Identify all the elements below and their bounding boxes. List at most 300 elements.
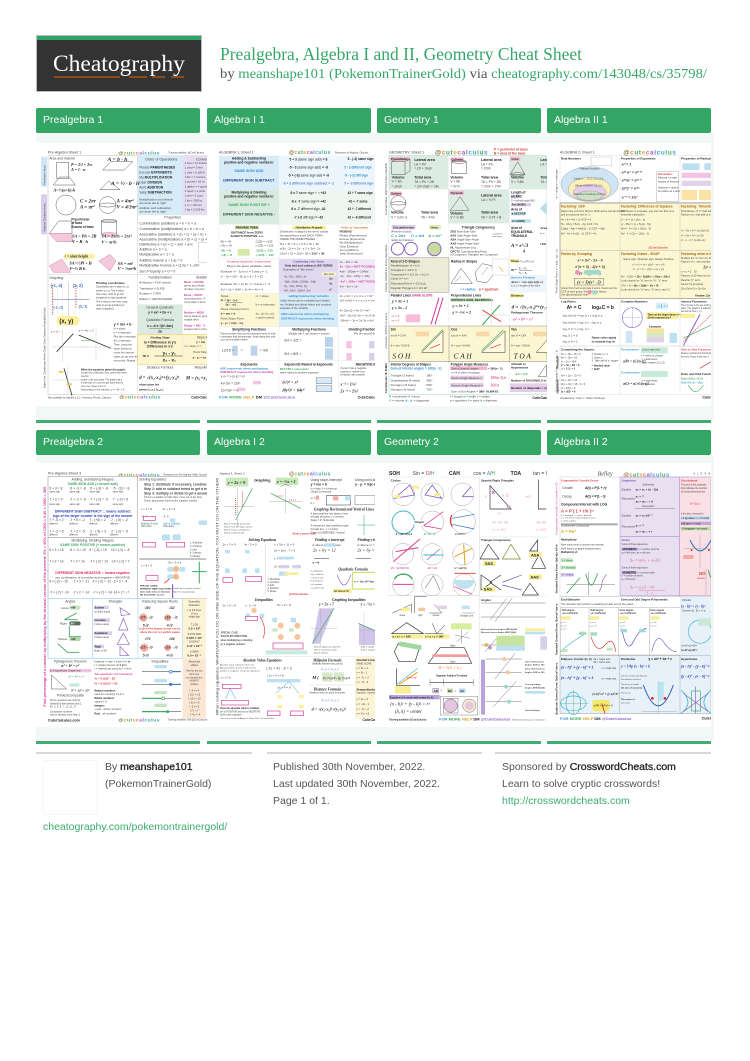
panel: solving equations: x + 4x = 12 — [274, 556, 289, 560]
panel: properties: Zero Property a × 0 = 0 — [139, 269, 175, 273]
panel: log rules: Log Rules: — [561, 300, 577, 304]
panel: inequalities: -5x + 3 > 8 — [277, 603, 291, 607]
panel: area of 2-D shapes: Triangle A = 1/2 b·h — [391, 268, 417, 272]
panel: area and volume: P = 2·l + 2w — [71, 162, 92, 167]
panel: angles: Corresponding — [525, 684, 541, 686]
panel: intercepts — [313, 538, 388, 564]
side tabs: Perimeter Area — [42, 165, 46, 185]
panel: line and polygon angles: a + a + c = 180° — [392, 635, 411, 639]
panel: order of operations: My MULTIPLICATION — [139, 175, 173, 179]
panel: reducing square roots: Look for the largest root we can do, — [139, 628, 181, 631]
panel: order of operations: Order of Operations — [145, 157, 177, 161]
panel: completing the square: (x + 3/2)² = 6 — [561, 390, 576, 394]
panel: pythagorean theorem and area composite: Ex: 2, 3, 5, 7, 11, 13, 17 — [50, 706, 77, 709]
heading: Geometry 1 — [377, 108, 541, 133]
panel: inequalities — [221, 598, 308, 654]
panel: solving equations: 5. Multiply — [190, 555, 201, 558]
panel: distributive property — [279, 224, 339, 259]
panel: multiplying and dividing integers: -7 × 2 = -14 — [73, 591, 89, 595]
panel: absolute value: positive — [190, 683, 199, 686]
panel: ellipses, parabola, hyperbola: (y - k)² - (x - h)² = — [681, 674, 710, 678]
panel: factoring: 5x - 10xy = 5x(1 - 2y) GCF = 5x — [561, 222, 599, 226]
panel: graphing: y-intercept of 3, and we get down and up — [81, 382, 124, 385]
heading: Prealgebra 1: Prealgebra 1 — [43, 114, 103, 126]
panel: parallel and perpendicular: y = -⅓x - 1 — [357, 702, 370, 706]
panel: altitude and diagonals: Hypotenuse — [511, 366, 529, 370]
panel: combining like terms: ab — [329, 277, 333, 281]
panel: factoring — [560, 203, 718, 298]
panel: pythagorean theorem and area composite: Prime numbers can only be — [50, 699, 81, 702]
panel: pyramid: TA = ½ Pl + B — [481, 215, 502, 219]
heading: Algebra I 1 — [207, 108, 371, 133]
panel: transformations: Translation = SLIDE — [139, 286, 165, 290]
panel: complex numbers: Take out the largest factor of i — [648, 313, 681, 316]
panel: circles: Circles — [391, 478, 401, 482]
panel: slope-intercept: (Slope) (y-intercept) — [311, 491, 332, 494]
panel: area and volume: SA = 2πrh + 2πr² — [101, 234, 132, 239]
panel: pythagorean theorem and area composite: a² is hypotenuse, longest side — [50, 670, 82, 673]
panel: cone: V = ⅓Bh — [511, 180, 524, 184]
panel: properties: Commutative (addition) a + b = b + a — [139, 222, 196, 226]
panel: special right triangles: Special Right Triangles — [481, 478, 514, 482]
panel: factoring: Factor by Grouping — [561, 252, 592, 256]
panel: adding and subtracting integers: -5 + -3 = -8 — [69, 486, 86, 490]
panel: series: ARITHMETIC — [622, 548, 637, 551]
panel: SOH CAH TOA: θ = sin⁻¹(O/H) — [391, 343, 410, 347]
panel: adding and subtracting integers: different — [110, 522, 119, 525]
panel: sequences: Explicit — [622, 488, 631, 492]
panel: pyramid: Volume — [450, 211, 463, 215]
panel: pythagorean theorem and area composite: Pythagorean Theorem — [54, 659, 87, 663]
panel: cylinder: = πr²h — [450, 184, 460, 188]
panel: quadratic formula: x, y form and — [311, 576, 324, 579]
panel: exponents: 2x⁻³ = 2/x³ — [340, 388, 359, 393]
panel: graphing: y = -⅓x + 3 — [79, 329, 94, 333]
panel: graphing: Step 1: Find the y-intercept — [224, 522, 251, 525]
panel: graphing horizontal and vertical — [311, 507, 376, 535]
panel: graphing: (3,-1) — [79, 305, 88, 309]
panel: multiplying and dividing: DIFFERENT SIGN NEGATIVE - — [223, 212, 276, 216]
panel: ellipses, parabola, hyperbola: Ellipses: Center (h, k) — [561, 657, 592, 661]
panel: prism/cube: Prism/Cube — [391, 157, 408, 161]
panel: cylinder: Volume — [450, 175, 463, 179]
panel: absolute value: ALWAYS POSITIVE +++ — [231, 234, 264, 238]
panel: interior angles: Quadrilateral (4 sides) — [391, 378, 420, 382]
panel: log rules: Same rules apply — [592, 335, 617, 339]
panel: real numbers: Real Numbers — [561, 157, 582, 161]
panel: equilateral triangle: Area — [540, 226, 547, 230]
panel: SOH CAH TOA: θ = cos⁻¹(A/H) — [451, 343, 470, 347]
panel: properties: Addition a + 0 = a — [139, 248, 167, 252]
panel: parallel and perpendicular — [355, 657, 378, 718]
panel: completing the square: = (b/2)² — [592, 367, 600, 371]
panel: absolute value: |-8| = +8 — [221, 244, 232, 248]
panel: adding and subtracting integers: different — [89, 534, 98, 537]
panel: slope block: y - y₁ = m(x - x₁) — [221, 321, 244, 325]
panel: factoring: (x + 3)(x² - 2) — [579, 271, 602, 275]
panel: graphing: y = 2x - 1 — [51, 329, 63, 333]
panel: solving equations: Solving Equations: — [139, 477, 167, 481]
panel: scientific notation: 1 to 9.9 times — [187, 609, 202, 612]
panel: graphing inequalities — [311, 598, 378, 655]
panel: angles: Angles ARE EQUAL — [525, 686, 546, 689]
panel: triangles: Right — [95, 645, 101, 648]
panel: absolute value: | 7 | = 7 — [190, 709, 199, 713]
heading: SOH CAH TOA strip: TOA — [511, 471, 522, 477]
panel: transformations: Reflection = FLIP (mirror) — [139, 281, 171, 285]
panel: multiplying and dividing: 6 x -7 different sign -42 — [292, 207, 326, 211]
panel: conversions: 1 foot = 12 inches — [185, 161, 207, 165]
panel: adding and subtracting: -5 - (-3) diff sign — [345, 173, 368, 177]
footer: author — [105, 761, 211, 790]
panel: exponential growth and decay: t = time in years — [561, 519, 576, 522]
panel: circles: (x-h)²+(y-k)²= — [681, 644, 697, 648]
panel: solving equations: 2x + 3 = 9 — [223, 542, 236, 546]
panel: midpoint and distance formula: d = √(x₂-x₁)²+(y₂-y₁)² — [312, 706, 347, 711]
panel: permutation and combination: n = total items — [642, 358, 658, 361]
panel: permutation and combination: Permutation: — [621, 348, 640, 352]
panel: slope block: y = mx + b — [221, 311, 236, 315]
panel: ellipses, parabola, hyperbola: 2a = major axis — [593, 658, 611, 661]
panel: absolute value: -|-125| = -125 — [256, 253, 274, 257]
side rotated pink text: Find percentage of a number by multiplying by the decimal version of the percent: 5% = 60% of 1500 = 0.40 × 1500 = 360 — [43, 487, 47, 707]
panel: cylinder: = 2πrh + 2πr² — [481, 184, 502, 188]
panel: scientific notation: 5,670,000 — [188, 632, 201, 636]
side rotated text: When solving equations, WHATEVER YOU DO ON ONE SIDE OF THE EQUATION, YOU MUST DO ON THE OTHER! — [216, 478, 220, 715]
panel: properties — [138, 215, 217, 274]
panel: adding and subtracting — [219, 156, 376, 190]
panel: prism/cube: LA = Ph — [414, 163, 426, 167]
panel: order of operations cell: Sally (Subtraction) — [340, 252, 363, 256]
panel: circumference and area: A = πr² — [428, 233, 442, 238]
panel: distance and pythagorean: a² + b² = c² — [513, 316, 533, 321]
panel: factoring: (x + 3)(x² - 2) — [577, 279, 602, 284]
sheet: Pre-Algebra Sheet 1: Also available for Algebra 1 & 2, Geometry, Precalc, Calculus — [48, 396, 112, 399]
panel: distance and midpoint: points (x₁,y₁) (x₂,y₂) — [138, 387, 164, 391]
panel: adding and subtracting integers: different — [49, 534, 58, 537]
panel: arc and sector: Area of — [511, 207, 523, 211]
side rotated text — [554, 169, 558, 392]
panel: graphing: Write the equation given the graph: — [81, 367, 126, 371]
panel: completing the square: 2. Move c — [592, 356, 603, 359]
panel: statistics: Mean = DIVIDE — [184, 280, 204, 284]
panel: multiplying and dividing integers: -14 × 2 = -7 — [113, 591, 129, 595]
panel: graphing: y = -½x + 1 — [276, 479, 296, 484]
panel: exponential growth and decay: P = principal, r = rate in decimal — [561, 514, 592, 517]
panel: triangle congruency: SSS Side-Side-Side — [450, 229, 476, 233]
panel: completing the square: Hyperbola — [555, 379, 559, 393]
panel: order of operations cell: Dear (Division) — [340, 244, 359, 248]
panel: multiplying and dividing: -6 x -7 same sign = +42 — [291, 199, 326, 203]
panel: end behavior: y = x — [561, 622, 567, 624]
panel: absolute value — [183, 658, 206, 718]
panel: quadratic formula: Quadratic Formula — [339, 568, 368, 572]
panel: radius in shapes: Radius in Shapes — [451, 259, 478, 263]
panel: parallel and perpendicular: y = -7x + 2 — [357, 707, 370, 711]
panel: end behavior: y = -x³ — [590, 624, 597, 627]
panel: order of operations cell — [340, 226, 369, 256]
panel: graphing: Step 4: Label the line — [224, 531, 245, 534]
panel: absolute value: from zero — [189, 673, 200, 676]
panel: evaluate: Evaluate x² - 3y for x = 3 and y = -1 — [221, 269, 268, 273]
panel: properties of exponents: aᵐ·aⁿ = aᵐ⁺ⁿ — [622, 171, 643, 175]
panel: factoring: Determine common factors. Both terms can be divided — [561, 209, 626, 213]
panel: series: GEOMETRIC — [622, 572, 637, 574]
panel: cone: Volume — [511, 175, 524, 179]
panel: distance and pythagorean: Pythagorean Theorem — [511, 311, 543, 315]
panel: pyramid: Pyramid — [451, 191, 463, 195]
panel: sequences: Explicit — [622, 513, 631, 517]
panel: circumference and area: C = 2πr — [391, 233, 406, 238]
panel: ellipses, parabola, hyperbola: (x-h)²/a² + (y-k)²/b² — [592, 692, 619, 696]
panel: slope block: m = (y₂ - y₁) — [221, 298, 238, 302]
panel: sphere: Total area — [421, 211, 439, 215]
panel: slope block: = given points — [256, 315, 275, 319]
panel: adding and subtracting integers: same sign — [89, 492, 101, 494]
panel: quadratic formula: c= y-intercept — [311, 586, 324, 589]
panel: log rules: log_b b = 1 — [563, 339, 578, 343]
panel: graphing: (b): y intercept — [114, 339, 131, 343]
panel: pyramid — [448, 189, 509, 223]
panel: special right triangles: x : x√3 — [535, 527, 546, 531]
panel: polygon angle measures: Interior Angle Measure = — [451, 376, 482, 380]
panel: radius in shapes — [451, 259, 509, 291]
panel: triangles: 3 sides equal — [94, 636, 109, 639]
panel: inequalities: when multiplying or dividing — [221, 639, 253, 642]
panel: interest and number types: Natural numbers — [94, 689, 116, 693]
panel: completing the square: x² + 3x + 9/4 = 6 — [561, 363, 580, 367]
panel: factoring: x³ - y³ = (x - y)(x² + xy + y²) — [633, 267, 664, 271]
panel: ellipses, parabola, hyperbola: (x - h)² + (y - k)² = 1 — [561, 676, 594, 680]
panel: equilateral triangle: Area of — [511, 226, 523, 230]
panel: slope: m = Difference in y's — [144, 340, 176, 344]
panel: special right triangles — [480, 477, 547, 537]
panel: SOH CAH TOA: Cos — [451, 327, 457, 331]
panel: line and polygon angles: M = ½(b₁ + b₂) — [437, 666, 462, 670]
panel: polygon angle measures: 180(n-2)/n — [490, 376, 506, 380]
panel: ellipses, parabola, hyperbola: Parabolas — [621, 657, 636, 661]
side rotated text: Inverse: NEGATE p and q Hypothesis — [384, 244, 388, 292]
panel: prism/cube: Volume — [392, 175, 405, 179]
panel: series: Sₙ = a₁(1 - rⁿ) — [630, 584, 655, 589]
panel: conversions — [183, 156, 216, 215]
panel: end behavior: y = x⁴ — [620, 625, 625, 627]
panel: graphing: (negative) or right (positive). — [96, 297, 127, 300]
panel: exponential growth and decay: A = Pe — [561, 529, 574, 534]
panel: solving equations: 3x + 1 = 16 — [274, 565, 290, 569]
panel: area of 2-D shapes: Rhombus/Kite A = 1/2 d₁d₂ — [391, 281, 427, 285]
panel: distance and midpoint: where given two — [139, 383, 160, 387]
heading: Prealgebra 2 — [36, 430, 200, 455]
sheet: Geometry Sheet 1: a = apothem b = base d = diameter — [450, 399, 497, 403]
panel: interest and number types: % = 9.5(12)² = $3 — [94, 681, 118, 685]
panel: exponents: SUBTRACT exponents when dividing — [220, 370, 274, 374]
panel: statistics: Mode = MOST — [184, 293, 203, 297]
panel: interest and number types: Interest = rate × time: I = rt — [94, 659, 130, 663]
panel: slope — [138, 334, 218, 364]
panel: exponential growth and decay: rt — [574, 529, 576, 533]
panel: special right triangles: x √2 — [501, 493, 509, 497]
panel: transformations: Transformations — [148, 276, 172, 280]
panel: polygon angle measures: Polygon Angle Measures — [451, 362, 488, 366]
panel: order of operations: Excuse EXPONENTS — [139, 170, 172, 174]
panel: line and polygon angles: z²=c·d — [406, 676, 417, 680]
panel: interior angles: Sum of interior angles = 180(n - 2) — [391, 367, 441, 371]
panel: exponents rules blue block — [279, 293, 339, 327]
footer: sponsor: http://crosswordcheats.com — [502, 795, 630, 807]
panel: distributive property: 5(x + 6) = 5·x + 5·6 = 5x + 30 — [280, 242, 320, 246]
panel: factoring: 4y² - 1 = (2y + 1)(2y - 1) — [621, 231, 649, 235]
panel: combining variables: -18x²y³ ÷ 3y = 3x·3y = 6x² — [340, 319, 374, 323]
panel: ellipses, parabola, hyperbola: Hyperbolas — [681, 657, 698, 661]
panel: triangles — [93, 598, 138, 658]
sheet: Algebra 2 Sheet 2: Belley — [598, 472, 613, 478]
panel: factoring: a × c = 2 · 10 — [681, 269, 697, 273]
panel: factoring: x² + 5x + 6 = (x+2)(x+3) — [681, 229, 709, 233]
panel: order of operations cell: PEMDAS — [340, 230, 352, 234]
panel: graphing horizontal and vertical: Graphing Horizontal and Vertical Lines — [314, 507, 375, 511]
panel: solving equations: 4. Subtract — [268, 587, 279, 590]
panel: adding and subtracting: -5 - 3 (same sign add) = -8 — [289, 165, 328, 169]
panel: cylinder: Cylinder — [451, 157, 464, 161]
panel: equation of a circle: Equation of a circle with center (h, k) — [390, 696, 433, 699]
panel: solving equations: 1. Distribute — [190, 542, 203, 545]
panel: properties of exponents: Irrational = cannot — [658, 186, 678, 189]
panel: factoring: (2x+3)(x+2) = 2x²+5x — [681, 287, 706, 291]
panel: one-to-one, even and odd: Odd if f(-x) = -f(x) — [681, 380, 703, 384]
panel: absolute value: ALWAYS — [190, 680, 199, 683]
panel: prism/cube: = (lw)h — [392, 184, 402, 188]
panel: line and polygon angles: AC — [460, 689, 465, 693]
heading: Algebra II 2 — [547, 430, 711, 455]
panel: exponential growth and decay: n = # of times compounded per year — [561, 517, 596, 520]
panel: graphing horizontal and vertical: Slope is UNDEFINED: Vertical — [311, 531, 345, 534]
panel: end behavior: y = -x⁴ — [650, 625, 657, 627]
panel: properties of exponents: Rational = a ratio — [658, 177, 678, 180]
panel: completing the square: (x + 3/2)² = 6 — [561, 368, 576, 371]
panel: polygon angle measures: = 180(n - 2) — [488, 366, 503, 370]
panel: exponents: ADD exponents when multiplying — [220, 366, 268, 370]
panel: area and volume: P=perimeter — [71, 218, 90, 222]
panel: combining like terms: -5ab, 10ab, 100ab, -5ab — [284, 279, 317, 283]
panel: altitude and diagonals: Altitude to — [511, 362, 526, 366]
sheet: Pre-Algebra Sheet 1: Tutoring available: @CuteCalculus — [168, 151, 205, 154]
heading: Geometry 2 — [377, 430, 541, 455]
panel: sequences: Recursive — [622, 525, 635, 529]
panel: properties: Multiplicative a × 1 = a — [139, 253, 174, 257]
panel: multiplying and dividing: SAME SIGN POSITIVE + — [229, 203, 270, 207]
panel: adding and subtracting integers: same sign — [49, 504, 61, 506]
panel: parallel lines: y = 3x - 2 — [391, 306, 407, 310]
sheet: Pre-Algebra Sheet 3: Pre-Algebra Sheet 3 — [48, 471, 81, 475]
panel: distributive property: Distributive: multiply by the terms outside — [280, 230, 329, 234]
panel: parabola pink: Discriminant — [680, 479, 698, 483]
footer: publication dates — [273, 761, 440, 807]
panel: area and volume: V = ⅓πr²h — [118, 266, 137, 271]
panel: series: Sₙ = n(a₁ + aₙ)/2 — [630, 558, 661, 563]
panel: sequences: a₁ = ? — [636, 495, 644, 499]
sheet: Geometry Sheet 1: P = perimeter A = area — [389, 395, 420, 399]
panel: exponents: 4x²·5x³ = 20x⁵ — [221, 381, 241, 385]
panel: prism/cube: = (2l+2w)h + 2lw — [414, 184, 439, 188]
panel: exponents rules blue block: not. Multiply and divide letters and numbers — [280, 302, 332, 306]
sheet: Algebra 1 Sheet 2: @cutecalculus — [289, 472, 331, 478]
panel: graphing: value up, go over the — [114, 355, 139, 359]
panel: multiplying and dividing integers: 5 ÷ (-3) = 15 — [89, 548, 107, 552]
panel: absolute value: -|-8| = -8 — [221, 253, 233, 257]
panel: end behavior: Even degree — [620, 610, 634, 612]
panel: solving equations: Check: plug answer back into the equation, simplify — [144, 500, 198, 503]
panel: properties of exponents: Remember: — [658, 172, 673, 176]
panel: area and volume: A=½(a+b)·h — [52, 188, 76, 193]
panel: parallel lines — [391, 293, 443, 324]
side rotated text: Standard Vertex Form: f(x)=a(x-h)²+k — [554, 544, 558, 593]
panel: special right triangles: 45 - 45 - 90 — [492, 521, 508, 525]
panel: angles: Alternate Interior Angles ARE EQUAL — [481, 631, 517, 634]
sheet: Pre-Algebra Sheet 3: @cutecalculus — [118, 717, 160, 723]
panel: complex numbers: Examples — [649, 325, 662, 329]
panel: area and volume: ℓ = slant height — [65, 255, 89, 259]
panel: graphing: Coordinates are in pairs (x, y) — [96, 286, 129, 289]
panel: multiplying and dividing integers: -14 × (-2) = 7 — [111, 559, 130, 563]
panel: adding and subtracting integers: -5 + (-3) = -8 — [89, 486, 108, 490]
panel: evaluate: 3x² + 2y = 3(4)² + 2(-4) = 40 = 4 — [221, 287, 263, 291]
panel: ellipses, parabola, hyperbola — [560, 656, 711, 715]
panel: angles: Angles — [65, 599, 76, 603]
panel: quadratic formula — [311, 568, 376, 593]
panel: circles: a·b = c·d — [428, 567, 438, 570]
panel: ellipses, parabola, hyperbola: y = ax² + bx + c — [648, 657, 672, 661]
panel: inequalities: x - 2 > 8 — [245, 604, 257, 608]
panel: multiplying and dividing integers: -7 × (-2) = -14 — [49, 591, 69, 595]
panel: SOH CAH TOA: sin θ = O/H — [391, 333, 406, 337]
panel: polygon angle measures: 360/n — [489, 383, 499, 387]
panel: exponential growth and decay — [560, 479, 618, 534]
panel: absolute value equations: set to POSITIVE and set to NEGATIVE — [220, 710, 261, 713]
panel: solving equations: INFINITELY MANY SOLUTIONS — [140, 587, 172, 590]
panel: evaluate: x² - 3y = (3)² - 3(-1) = 9 + 3 = 12 — [221, 275, 264, 279]
panel: slope and heron — [510, 259, 547, 292]
panel: absolute value: |-125| = +125 — [256, 244, 274, 248]
panel: intercepts: x = 6 — [313, 560, 320, 564]
panel: exponents rules blue block: separate of the variable. — [280, 306, 309, 310]
panel: combining like terms: Only add and subtract LIKE TERMS — [285, 263, 333, 267]
panel: graphing: (x, y) — [59, 319, 73, 325]
panel: graphing: Step 3: Draw a straight line — [224, 528, 251, 531]
panel: polygon angle measures — [450, 362, 506, 394]
panel: multiplying and dividing integers: 5 × 3 = 15 — [49, 548, 64, 552]
panel: properties of exponents: fraction or decimal — [658, 180, 679, 183]
panel: absolute value equations: Solve each equation! — [220, 714, 242, 717]
panel: inequalities: 2x + 3 < 9 — [223, 604, 236, 608]
panel: complex numbers: Complex Numbers — [621, 300, 648, 304]
panel: exponential growth and decay: A(t) = P(1 - r)ᵗ — [585, 494, 606, 498]
panel: exponential growth and decay: Compound Interest with LOG — [561, 503, 608, 507]
panel: absolute value: | 12 | = 12 — [188, 693, 201, 697]
panel: line and polygon angles: AB — [434, 689, 439, 693]
panel: solving equations: 4x - 3 = 9 — [244, 542, 257, 546]
panel: adding and subtracting: 5 + 3 (same sign add) = 8 — [290, 157, 328, 161]
panel: completing the square: x² + 3x = 15/4 — [561, 360, 577, 363]
panel: series: n = number of terms — [638, 548, 660, 551]
panel: equilateral triangle: 4 — [522, 248, 525, 253]
heading: SOH CAH TOA strip — [389, 471, 555, 477]
panel: arc and sector: πr²·(θ/360) — [512, 219, 525, 223]
sheet: Geometry Sheet 1: @cutecalculus — [435, 149, 488, 156]
panel: sequences: Arithmetic — [642, 482, 655, 486]
panel: multiplying and dividing: Multiplying & Dividing — [232, 191, 267, 195]
sheet: Pre-Algebra Sheet 3: Resources for Pre-Algebra, Math, Success — [164, 473, 207, 476]
